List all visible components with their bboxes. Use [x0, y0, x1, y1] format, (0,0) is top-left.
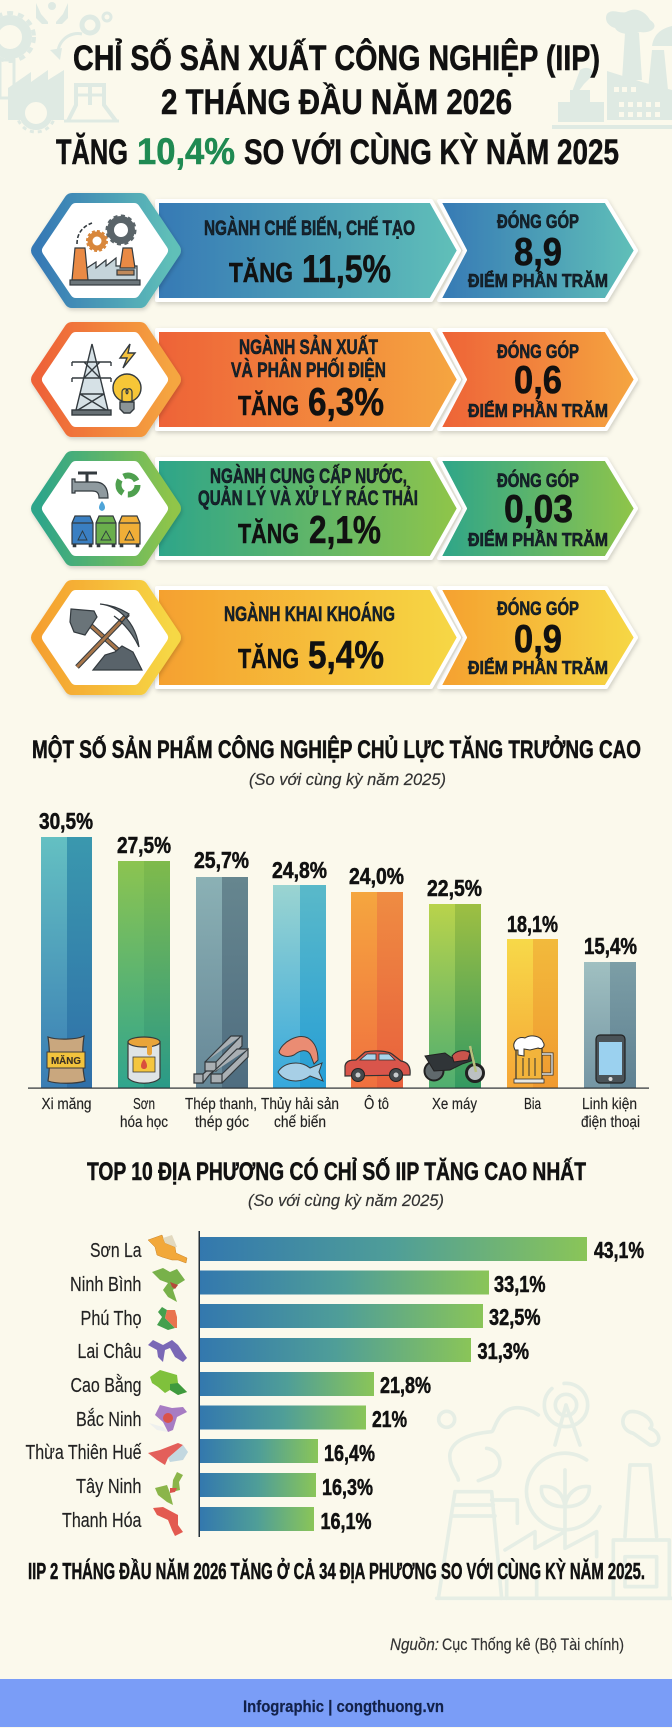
bar: xi măng: Xi măng	[42, 1096, 92, 1113]
row: thừa thiên huế: 16,4%	[324, 1440, 375, 1466]
contribution: 0,9: ĐÓNG GÓP	[497, 598, 579, 620]
row: ninh bình	[70, 1268, 546, 1302]
text: ngành chế biến: NGÀNH CHẾ BIẾN, CHẾ TẠO	[204, 217, 415, 240]
subheading: localities: (So với cùng kỳ năm 2025)	[248, 1191, 444, 1210]
text: ngành khai khoáng: NGÀNH KHAI KHOÁNG	[224, 603, 395, 626]
row: bắc ninh: Bắc Ninh	[76, 1408, 142, 1431]
bar: bia: 18,1%	[507, 911, 558, 937]
value: tăng 2,1%: 2,1%	[309, 509, 381, 552]
value: tăng 5,4%: 5,4%	[308, 634, 384, 677]
value: tăng 2,1%: TĂNG	[238, 518, 299, 549]
row: tây ninh: 16,3%	[322, 1474, 373, 1500]
bar: sơn hóa học: 27,5%	[117, 832, 171, 858]
row: cao bằng	[70, 1370, 431, 1398]
source: Cục Thống kê (Bộ Tài chính)	[442, 1635, 624, 1654]
contribution: 0,9: 0,9	[514, 618, 562, 661]
bar: thép thanh, thép góc: thép góc	[195, 1114, 249, 1131]
title: TĂNG	[56, 133, 128, 172]
bar: xe máy: Xe máy	[432, 1096, 477, 1113]
contribution: 0,9: ĐIỂM PHẦN TRĂM	[468, 657, 608, 678]
row: bắc ninh	[76, 1405, 407, 1432]
row: thừa thiên huế: Thừa Thiên Huế	[26, 1442, 142, 1464]
footer band	[0, 1679, 672, 1727]
row: cao bằng: 21,8%	[380, 1372, 431, 1398]
value: tăng 6,3%: 6,3%	[308, 381, 384, 424]
row: ninh bình: 33,1%	[494, 1271, 546, 1297]
bar: thủy hải sản chế biến: chế biến	[274, 1114, 326, 1131]
row: cao bằng: Cao Bằng	[70, 1374, 142, 1397]
bar chart: key products	[28, 808, 649, 1131]
text: ngành sản xuất và phân phối điện: NGÀNH SẢN XUẤT	[239, 336, 378, 359]
bar: ô tô	[345, 863, 410, 1113]
row: lai châu: Lai Châu	[78, 1341, 142, 1363]
bar: ô tô: 24,0%	[349, 863, 404, 889]
row: sơn la: Sơn La	[90, 1240, 142, 1262]
row: thừa thiên huế	[26, 1439, 375, 1466]
value: tăng 11,5%: 11,5%	[302, 248, 391, 291]
panel: ngành sản xuất và phân phối điện	[39, 330, 636, 429]
icon: shovel, pickaxe and ore pile	[70, 604, 142, 670]
background watermark: top right factory	[552, 10, 672, 129]
contribution: 8,9: ĐÓNG GÓP	[497, 211, 579, 233]
panel: ngành chế biến, chế tạo	[39, 201, 636, 300]
row: sơn la: 43,1%	[594, 1237, 644, 1263]
value: tăng 5,4%: TĂNG	[238, 643, 299, 674]
value: tăng 11,5%	[229, 248, 391, 291]
background watermark: top left industry icons	[0, 2, 119, 132]
icon: factory with gears	[70, 216, 140, 285]
value: tăng 2,1%	[238, 509, 381, 552]
value: tăng 6,3%	[238, 381, 384, 424]
row: thanh hóa: 16,1%	[320, 1508, 372, 1534]
row: lai châu	[78, 1338, 529, 1364]
bar: thủy hải sản chế biến	[261, 857, 339, 1131]
bar: thép thanh, thép góc: Thép thanh,	[185, 1096, 257, 1113]
bar: sơn hóa học: Sơn	[133, 1096, 155, 1113]
footer band: Infographic | congthuong.vn	[243, 1697, 444, 1716]
text: ngành cung cấp nước	[198, 464, 418, 510]
contribution: 0,6: ĐIỂM PHẦN TRĂM	[468, 400, 608, 421]
text: ngành cung cấp nước: QUẢN LÝ VÀ XỬ LÝ RÁC THẢI	[198, 486, 418, 510]
contribution: 8,9	[468, 211, 608, 291]
panel: ngành cung cấp nước, quản lý và xử lý rác thải	[39, 459, 636, 558]
text: ngành sản xuất và phân phối điện: VÀ PHÂN PHỐI ĐIỆN	[231, 358, 386, 382]
bar: linh kiện điện thoại: điện thoại	[581, 1114, 640, 1131]
value: tăng 6,3%: TĂNG	[238, 390, 299, 421]
subheading: products: (So với cùng kỳ năm 2025)	[249, 770, 446, 789]
bar: xi măng: MĂNG	[51, 1054, 81, 1067]
bar: linh kiện điện thoại: 15,4%	[584, 933, 637, 959]
title: 2 THÁNG ĐẦU NĂM 2026	[161, 82, 512, 122]
bar: thủy hải sản chế biến: Thủy hải sản	[261, 1096, 339, 1113]
row: lai châu: 31,3%	[478, 1338, 529, 1364]
bar: xi măng	[39, 808, 93, 1113]
row: tây ninh	[76, 1472, 373, 1505]
contribution: 0,9	[468, 598, 608, 678]
row: bắc ninh: 21%	[372, 1406, 407, 1432]
contribution: 0,6	[468, 341, 608, 421]
bar: linh kiện điện thoại: Linh kiện	[582, 1096, 637, 1113]
bar: ô tô: Ô tô	[364, 1094, 389, 1113]
bar: thép thanh, thép góc: 25,7%	[194, 847, 249, 873]
bar: sơn hóa học: hóa học	[120, 1114, 168, 1131]
panel: ngành khai khoáng	[39, 588, 636, 687]
source	[390, 1635, 624, 1654]
contribution: 0,03: 0,03	[504, 488, 573, 531]
row: phú thọ	[80, 1304, 540, 1330]
bar: sơn hóa học	[117, 832, 171, 1131]
bar: linh kiện điện thoại	[581, 933, 640, 1131]
bar: xe máy: 22,5%	[427, 875, 482, 901]
icon: power tower and light bulb	[72, 344, 141, 415]
bar: thép thanh, thép góc	[185, 847, 257, 1131]
bar: thủy hải sản chế biến: 24,8%	[272, 857, 327, 883]
contribution: 0,03: ĐÓNG GÓP	[497, 470, 579, 492]
row: phú thọ: Phú Thọ	[80, 1308, 142, 1330]
text: ngành cung cấp nước: NGÀNH CUNG CẤP NƯỚC,	[210, 464, 407, 488]
bar: bia	[507, 911, 558, 1113]
text: ngành sản xuất và phân phối điện	[231, 336, 386, 382]
value: tăng 5,4%	[238, 634, 384, 677]
background watermark: bottom right eco factory	[437, 1383, 672, 1598]
bar: xi măng: 30,5%	[39, 808, 93, 834]
source: Nguồn:	[390, 1635, 439, 1654]
contribution: 8,9: 8,9	[514, 231, 562, 274]
contribution: 0,03	[468, 470, 608, 550]
contribution: 0,03: ĐIỂM PHẦN TRĂM	[468, 529, 608, 550]
bar chart: top localities	[26, 1231, 644, 1537]
contribution: 0,6: 0,6	[514, 359, 562, 402]
bar: bia: Bia	[524, 1096, 541, 1113]
row: thanh hóa	[62, 1507, 372, 1536]
contribution: 8,9: ĐIỂM PHẦN TRĂM	[468, 270, 608, 291]
row: thanh hóa: Thanh Hóa	[62, 1510, 142, 1532]
contribution: 0,6: ĐÓNG GÓP	[497, 341, 579, 363]
row: phú thọ: 32,5%	[489, 1304, 540, 1330]
title	[56, 38, 619, 172]
row: ninh bình: Ninh Bình	[70, 1274, 142, 1296]
icon: water tap, recycling and bins	[72, 473, 140, 547]
value: tăng 11,5%: TĂNG	[229, 257, 293, 288]
row: tây ninh: Tây Ninh	[76, 1476, 142, 1498]
title: 10,4%	[137, 131, 235, 172]
row: sơn la	[90, 1235, 644, 1263]
bar: xe máy	[424, 875, 484, 1113]
